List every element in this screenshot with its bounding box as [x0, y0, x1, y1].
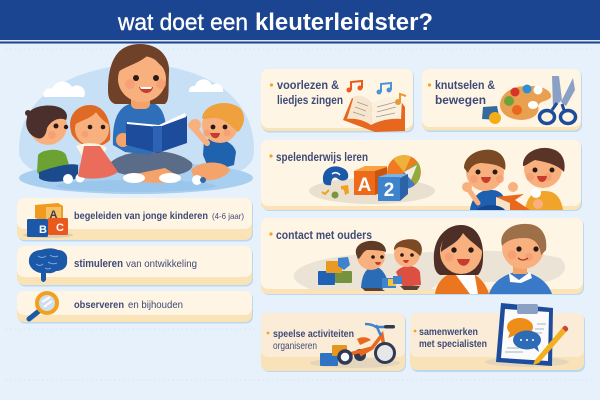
- text: knutselen &: [435, 78, 495, 92]
- panel: speelse activiteiten organiseren: [261, 313, 406, 372]
- child: girl in red dress: [70, 105, 118, 179]
- title banner: kleuterleidster?: [255, 9, 433, 36]
- illustration: parents: [434, 224, 552, 294]
- icon: alphabet blocks: B: [39, 224, 47, 236]
- text: [74, 258, 197, 270]
- panel: voorlezen & liedjes zingen: [261, 69, 414, 132]
- illustration: two children playing: [356, 239, 422, 291]
- illustration: ground shapes: [294, 251, 565, 290]
- text: [428, 78, 495, 107]
- panel: knutselen & bewegen: [422, 69, 582, 132]
- text: van ontwikkeling: [126, 258, 197, 270]
- icon: learning toys: [309, 155, 435, 204]
- text: [74, 299, 183, 311]
- text: spelenderwijs leren: [276, 150, 368, 164]
- icon: open book: [343, 96, 405, 132]
- icon: paper shapes: [482, 106, 501, 124]
- icon: toy blocks: [318, 257, 352, 285]
- panel: samenwerken met specialisten: [410, 303, 585, 372]
- text: speelse activiteiten: [273, 328, 354, 340]
- title banner: wat doet een: [117, 9, 248, 35]
- teacher: [108, 44, 192, 183]
- text: liedjes zingen: [277, 93, 343, 107]
- text: [270, 78, 343, 107]
- text: [267, 328, 354, 352]
- icon: learning toys: 2: [384, 180, 394, 201]
- text: en bijhouden: [128, 299, 183, 311]
- text: voorlezen &: [277, 78, 339, 92]
- text: begeleiden van jonge kinderen: [74, 210, 208, 222]
- text: bewegen: [435, 93, 486, 107]
- text: (4-6 jaar): [212, 211, 244, 221]
- illustration: two playing boys: [462, 148, 565, 210]
- icon: brain: [29, 248, 67, 282]
- icon: music notes: [346, 81, 406, 105]
- panel: contact met ouders: [261, 218, 584, 295]
- icon: alphabet blocks: C: [56, 222, 64, 234]
- title banner: [0, 0, 600, 44]
- text: samenwerken: [419, 326, 478, 338]
- panel: observeren en bijhouden: [17, 291, 253, 324]
- text: observeren: [74, 299, 124, 311]
- icon: tricycle and blocks: [310, 324, 400, 368]
- text: met specialisten: [419, 338, 487, 350]
- text: contact met ouders: [276, 228, 372, 242]
- text: organiseren: [273, 341, 317, 352]
- icon: alphabet blocks: A: [50, 209, 58, 221]
- child: blond boy: [189, 103, 244, 185]
- panel: spelenderwijs leren: [261, 140, 582, 211]
- icon: alphabet blocks: [23, 203, 73, 238]
- icon: learning toys: A: [358, 175, 372, 196]
- icon: magnifying glass: [29, 293, 57, 319]
- text: stimuleren: [74, 258, 123, 270]
- hero illustration: teacher reading to children: [19, 44, 254, 194]
- text: [414, 326, 487, 350]
- panel: stimuleren van ontwikkeling: [17, 246, 253, 286]
- icon: clouds: [43, 79, 223, 97]
- icon: paint palette: [500, 84, 551, 120]
- icon: scissors: [540, 76, 576, 124]
- panel: begeleiden van jonge kinderen: [17, 198, 253, 242]
- icon: clipboard with speech bubbles and pencil: [485, 303, 569, 367]
- child: boy in green shirt: [25, 106, 84, 184]
